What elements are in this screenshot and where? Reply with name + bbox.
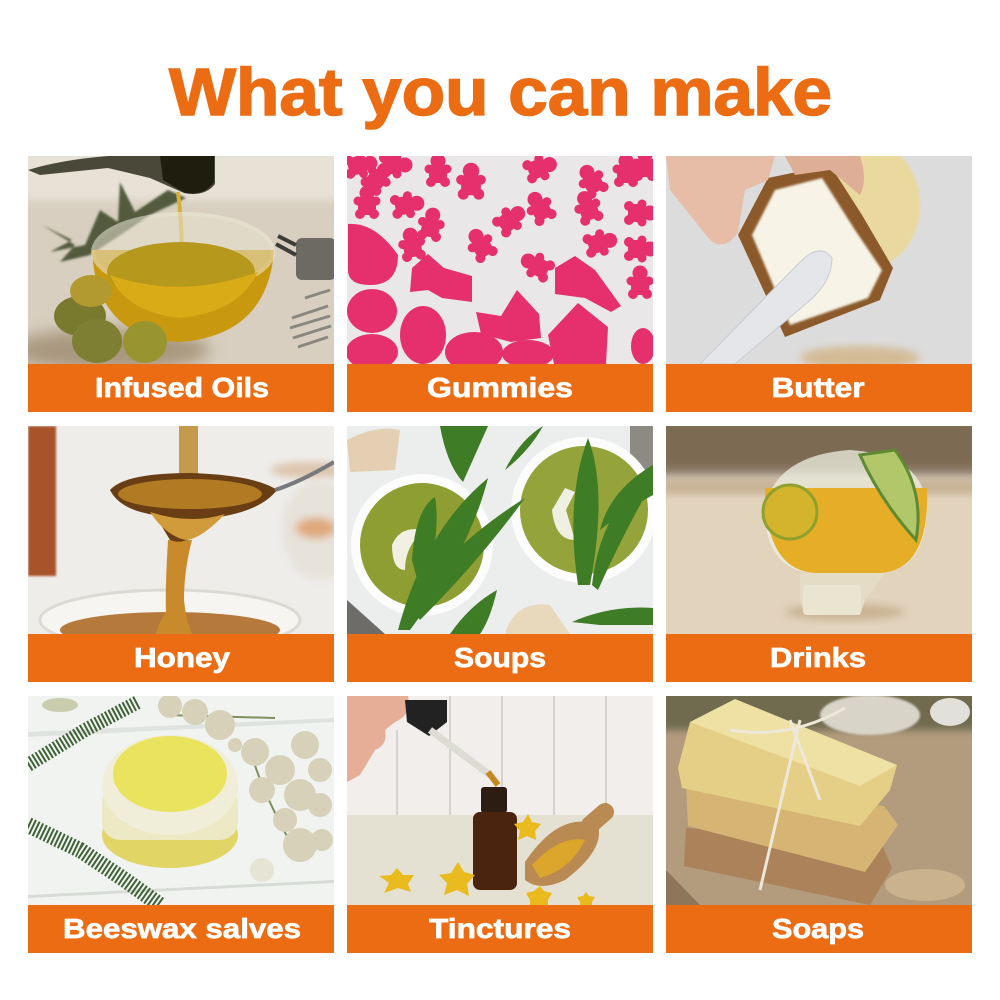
label: drinks xyxy=(666,634,972,682)
label: infused oils xyxy=(28,364,334,412)
label: drinks: Drinks xyxy=(770,642,866,673)
label: beeswax salves xyxy=(28,905,334,953)
label: butter xyxy=(666,364,972,412)
panel: tinctures xyxy=(347,696,653,953)
panel: honey xyxy=(28,426,358,682)
title: What you can make xyxy=(169,55,832,130)
panel: soaps xyxy=(666,696,972,953)
label: tinctures xyxy=(347,905,653,953)
label: beeswax salves: Beeswax salves xyxy=(63,913,301,944)
label: honey: Honey xyxy=(134,642,230,673)
panel: beeswax salves xyxy=(28,694,334,953)
label: honey xyxy=(28,634,334,682)
label: soaps: Soaps xyxy=(772,913,864,944)
label: tinctures: Tinctures xyxy=(429,913,571,944)
label: gummies xyxy=(347,364,653,412)
label: butter: Butter xyxy=(772,372,865,403)
label: infused oils: Infused Oils xyxy=(95,372,269,403)
panel: soups xyxy=(347,426,657,682)
panel: infused oils xyxy=(10,150,340,412)
label: gummies: Gummies xyxy=(427,372,573,403)
label: soups xyxy=(347,634,653,682)
panel: gummies xyxy=(342,148,658,412)
panel: drinks xyxy=(666,426,972,682)
label: soaps xyxy=(666,905,972,953)
panel: butter xyxy=(666,143,972,412)
label: soups: Soups xyxy=(454,642,546,673)
